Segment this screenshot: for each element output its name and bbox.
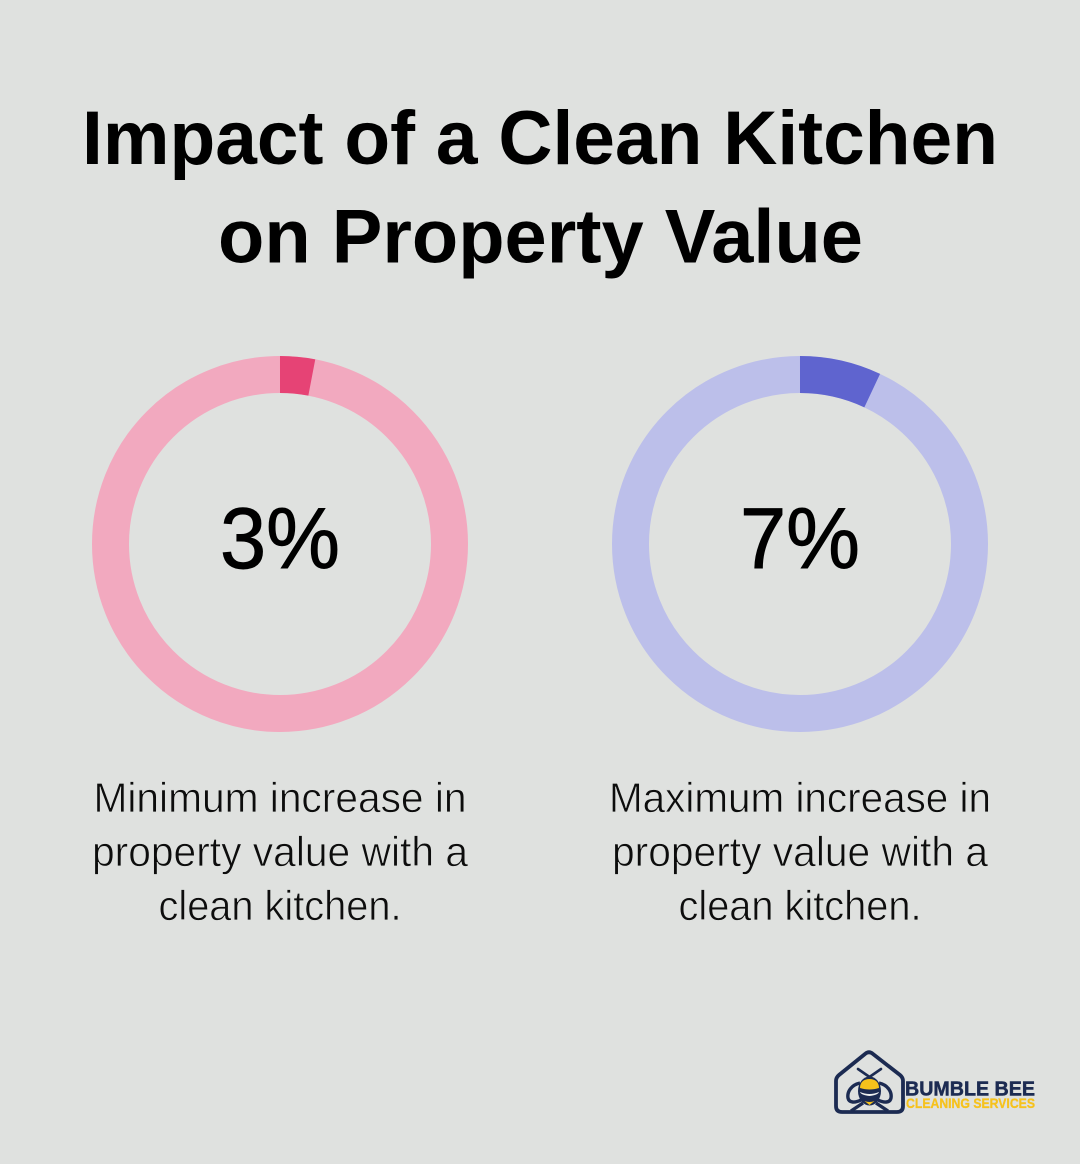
description: minimum: property value with a [92, 828, 469, 875]
description: maximum: Maximum increase in [609, 774, 991, 821]
title: on Property Value [218, 194, 863, 280]
donut chart: 3% [110, 374, 450, 714]
panel: maximum increase [609, 374, 991, 929]
logo: Bumble Bee Cleaning Services [836, 1052, 1035, 1112]
description: maximum: property value with a [612, 828, 989, 875]
description: maximum [609, 774, 991, 929]
title: Impact of a Clean Kitchen [82, 96, 998, 181]
value: 7%: 7% [740, 491, 860, 587]
description: minimum [92, 774, 469, 929]
value: 3%: 3% [220, 491, 340, 587]
icon: house with bee [836, 1052, 903, 1112]
wordmark: BUMBLE BEE [905, 1078, 1035, 1100]
donut chart: 7% [630, 374, 970, 714]
description: minimum: clean kitchen. [158, 882, 402, 929]
tagline: CLEANING SERVICES [906, 1096, 1035, 1111]
description: minimum: Minimum increase in [94, 774, 466, 821]
description: maximum: clean kitchen. [678, 882, 922, 929]
title [82, 96, 998, 280]
panel: minimum increase [92, 374, 469, 929]
